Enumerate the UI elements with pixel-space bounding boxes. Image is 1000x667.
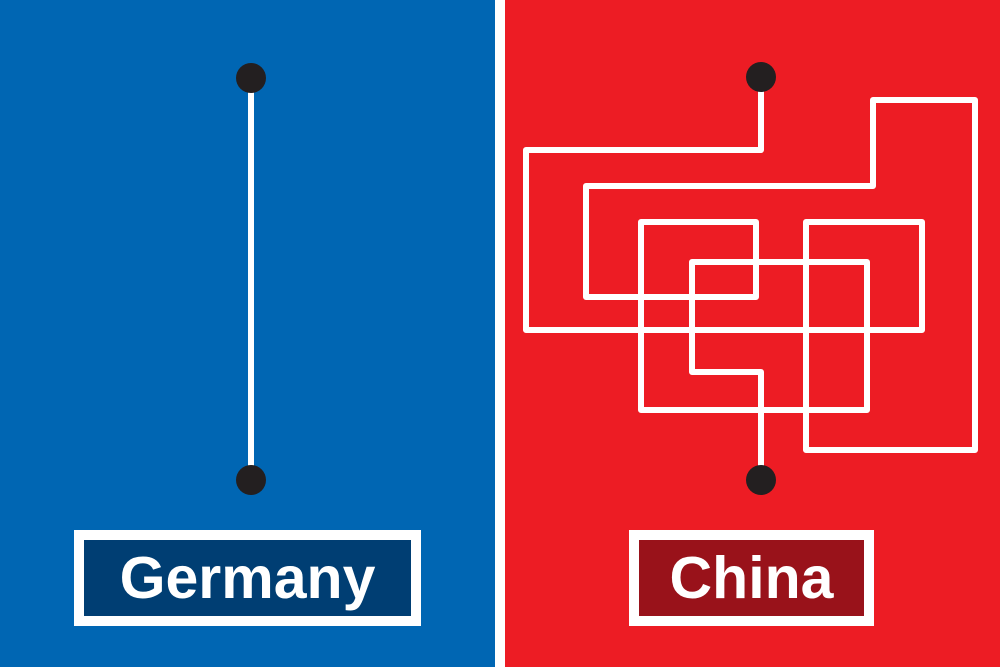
tangled path [523,62,978,495]
label: China [629,530,874,626]
label: Germany [74,530,421,626]
straight path [236,63,266,495]
label: China: China [670,545,833,611]
panel: Germany [0,0,495,667]
panel: China [505,0,1000,667]
label: Germany: Germany [120,545,375,611]
